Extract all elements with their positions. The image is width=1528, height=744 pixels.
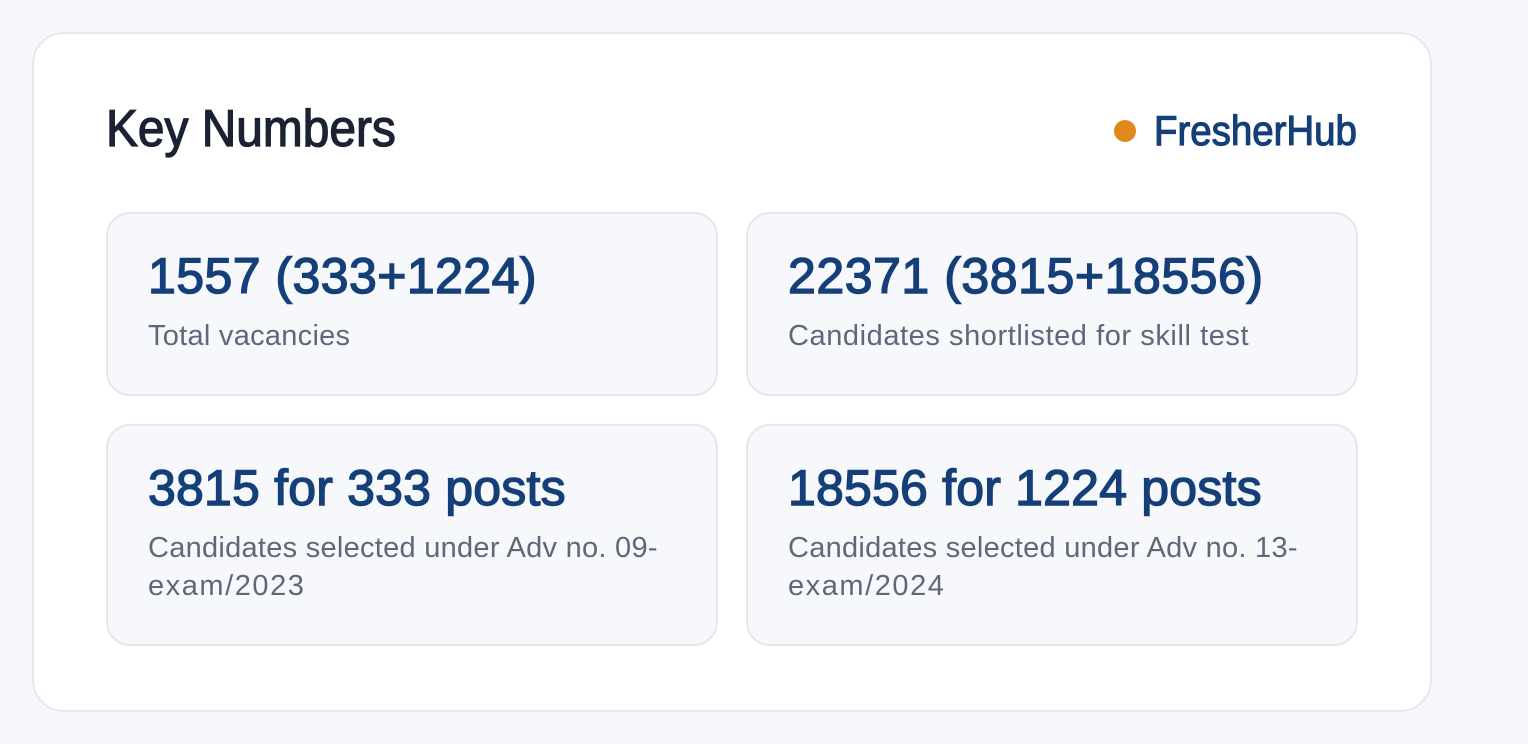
brand name: FresherHub bbox=[1154, 107, 1357, 154]
brand: FresherHub bbox=[1114, 107, 1357, 154]
icon: orange dot bbox=[1114, 120, 1136, 142]
stat card: 3815 for 333 posts bbox=[106, 424, 718, 646]
value: 1557 (333+1224) bbox=[148, 248, 537, 304]
label: Candidates shortlisted for skill test bbox=[788, 320, 1249, 352]
value: 22371 (3815+18556) bbox=[788, 248, 1264, 304]
label: Candidates selected under Adv no. 13- bbox=[788, 532, 1298, 564]
label: exam/2024 bbox=[788, 570, 945, 602]
label bbox=[148, 532, 658, 602]
label: exam/2023 bbox=[148, 570, 305, 602]
heading: Key Numbers: Key Numbers bbox=[106, 100, 396, 158]
stat card: shortlisted bbox=[746, 212, 1358, 396]
label bbox=[788, 532, 1298, 602]
label: Total vacancies bbox=[148, 320, 350, 352]
stat card: 18556 for 1224 posts bbox=[746, 424, 1358, 646]
value: 18556 for 1224 posts bbox=[788, 460, 1262, 516]
value: 3815 for 333 posts bbox=[148, 460, 566, 516]
label: Candidates selected under Adv no. 09- bbox=[148, 532, 658, 564]
stat card: total vacancies bbox=[106, 212, 718, 396]
